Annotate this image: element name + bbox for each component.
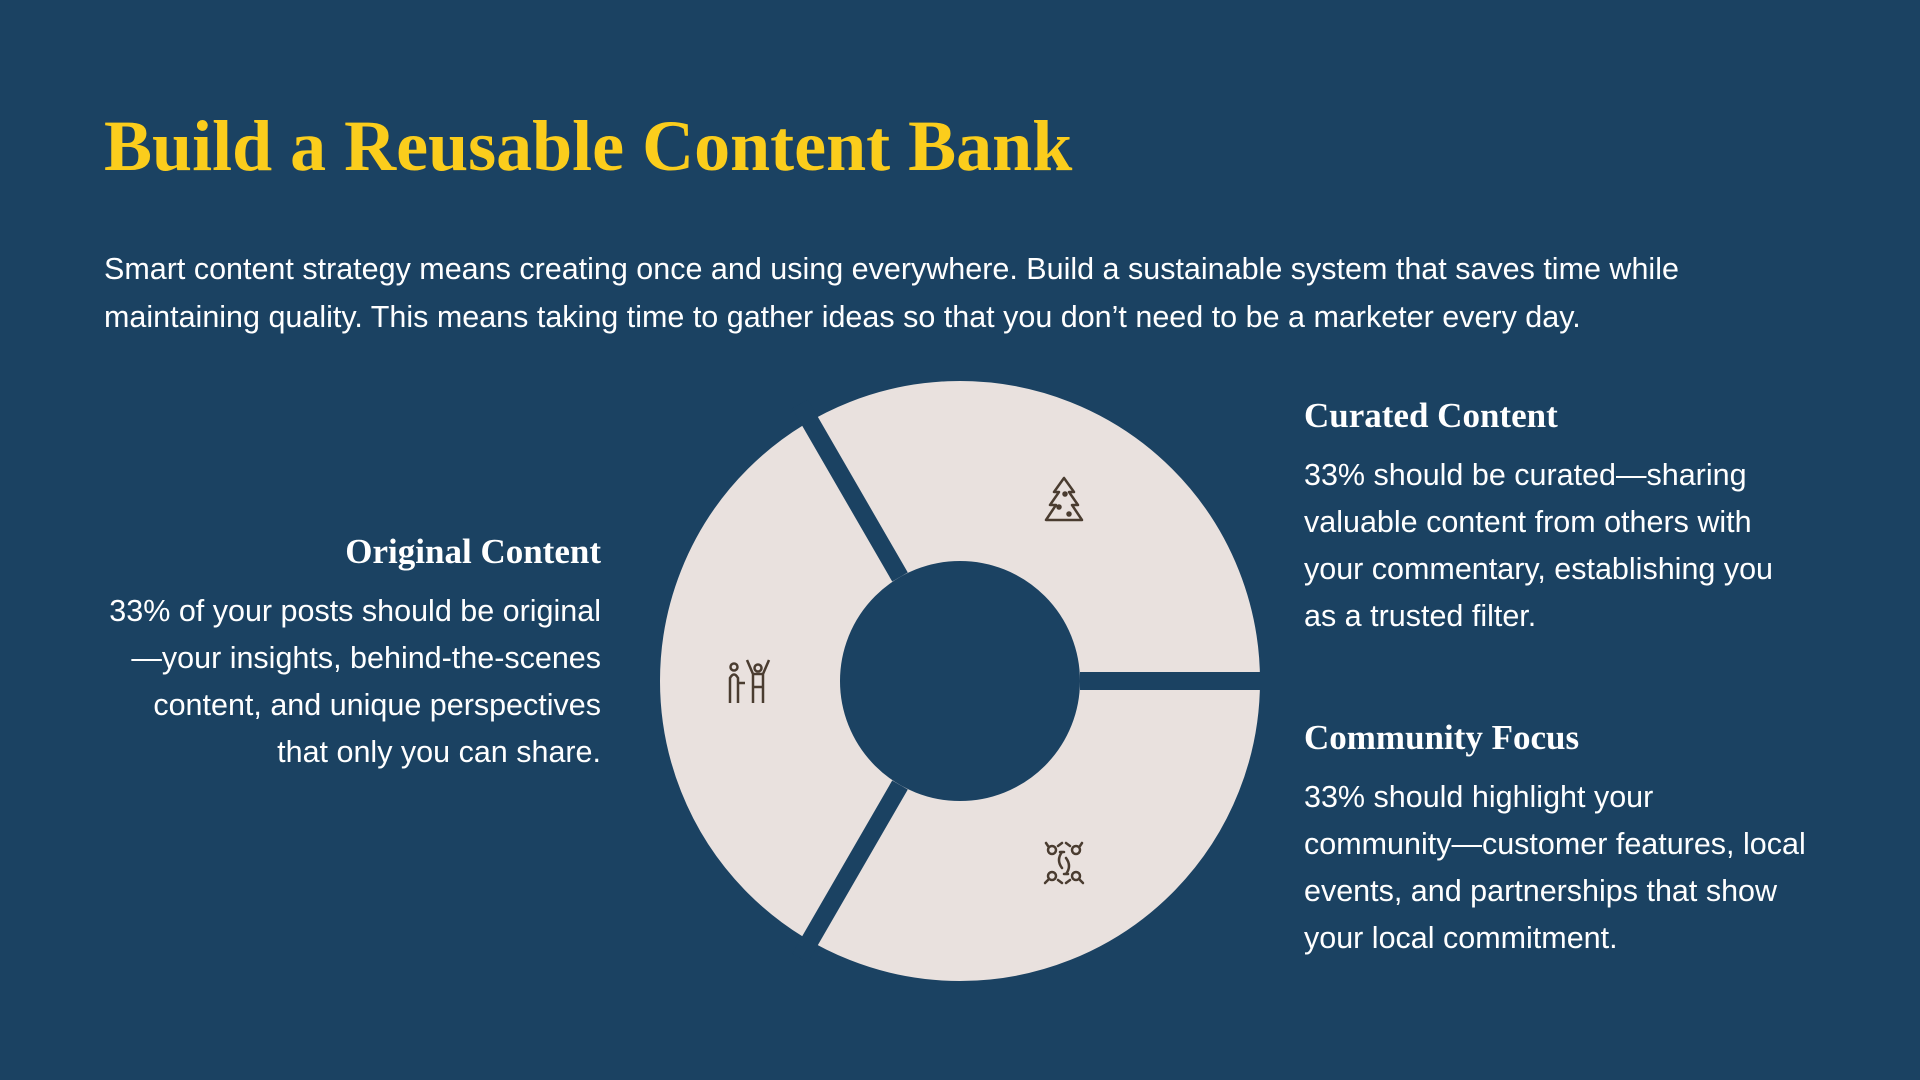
- text: community focus: community—customer features, local: [1304, 827, 1806, 861]
- segment ring: [750, 471, 1170, 891]
- heading: community focus: Community Focus: [1304, 718, 1579, 757]
- text: curated content: as a trusted filter.: [1304, 599, 1536, 633]
- text: curated content: 33% should be curated—sharing: [1304, 458, 1747, 492]
- heading: original content: Original Content: [345, 532, 601, 571]
- text: original content: —your insights, behind-the-scenes: [131, 641, 601, 675]
- gaps: [800, 404, 1270, 958]
- text: community focus: [1304, 780, 1806, 955]
- text: community focus: 33% should highlight your: [1304, 780, 1653, 814]
- text: curated content: valuable content from others with: [1304, 505, 1752, 539]
- text: original content: content, and unique perspectives: [153, 688, 601, 722]
- panel: original content: [109, 532, 601, 769]
- text: original content: [109, 594, 601, 769]
- heading: curated content: Curated Content: [1304, 396, 1558, 435]
- text: curated content: your commentary, establishing you: [1304, 552, 1773, 586]
- text: original content: that only you can share.: [277, 735, 601, 769]
- icon: tree: [1046, 478, 1082, 520]
- intro paragraph: Smart content strategy means creating once and using everywhere. Build a sustainable system that saves time while: [104, 252, 1679, 286]
- panel: curated content: [1304, 396, 1773, 633]
- panel: community focus: [1304, 718, 1806, 955]
- intro paragraph: [104, 252, 1679, 334]
- icon: people: [730, 660, 769, 703]
- text: community focus: events, and partnerships that show: [1304, 874, 1777, 908]
- icon: community cycle: [1045, 843, 1083, 883]
- text: original content: 33% of your posts should be original: [109, 594, 601, 628]
- intro paragraph: maintaining quality. This means taking time to gather ideas so that you don’t need to be a marketer every day.: [104, 300, 1581, 334]
- title: Build a Reusable Content Bank: [104, 106, 1072, 186]
- text: curated content: [1304, 458, 1773, 633]
- text: community focus: your local commitment.: [1304, 921, 1618, 955]
